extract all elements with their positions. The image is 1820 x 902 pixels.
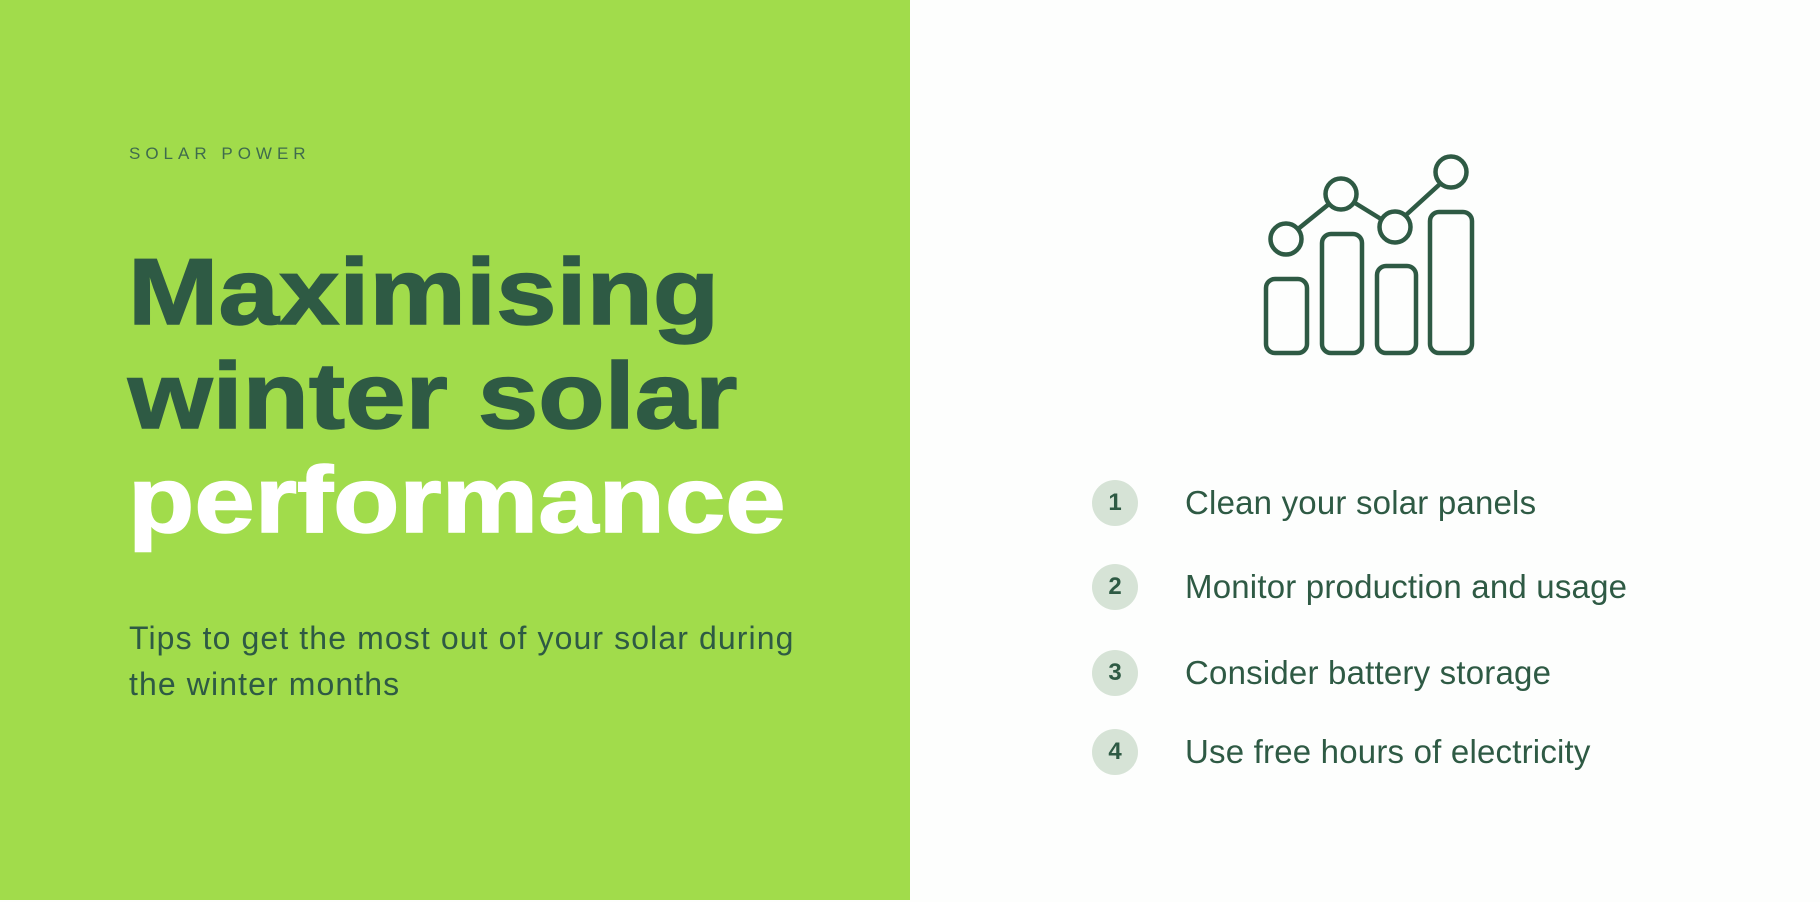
item 4: Use free hours of electricity <box>1185 733 1591 770</box>
title <box>126 239 786 552</box>
item 2 <box>1092 564 1627 610</box>
eyebrow label: SOLAR POWER <box>129 144 311 163</box>
item 4: 4 <box>1108 738 1122 765</box>
icon: bar chart with trend line <box>1264 154 1474 356</box>
list: tips <box>1092 480 1627 775</box>
item 4 <box>1092 729 1591 775</box>
subtitle: Tips to get the most out of your solar during <box>129 620 795 656</box>
panel: left green <box>0 0 910 900</box>
title: winter solar <box>128 343 737 448</box>
item 2: 2 <box>1108 573 1122 600</box>
item 1: Clean your solar panels <box>1185 484 1536 521</box>
item 3: Consider battery storage <box>1185 654 1551 691</box>
item 2: Monitor production and usage <box>1185 568 1627 605</box>
item 1 <box>1092 480 1536 526</box>
subtitle: the winter months <box>129 666 400 702</box>
subtitle <box>129 620 795 702</box>
title: performance <box>128 447 786 552</box>
item 3: 3 <box>1108 659 1122 686</box>
title: Maximising <box>128 239 719 344</box>
item 3 <box>1092 650 1551 696</box>
item 1: 1 <box>1108 489 1122 516</box>
